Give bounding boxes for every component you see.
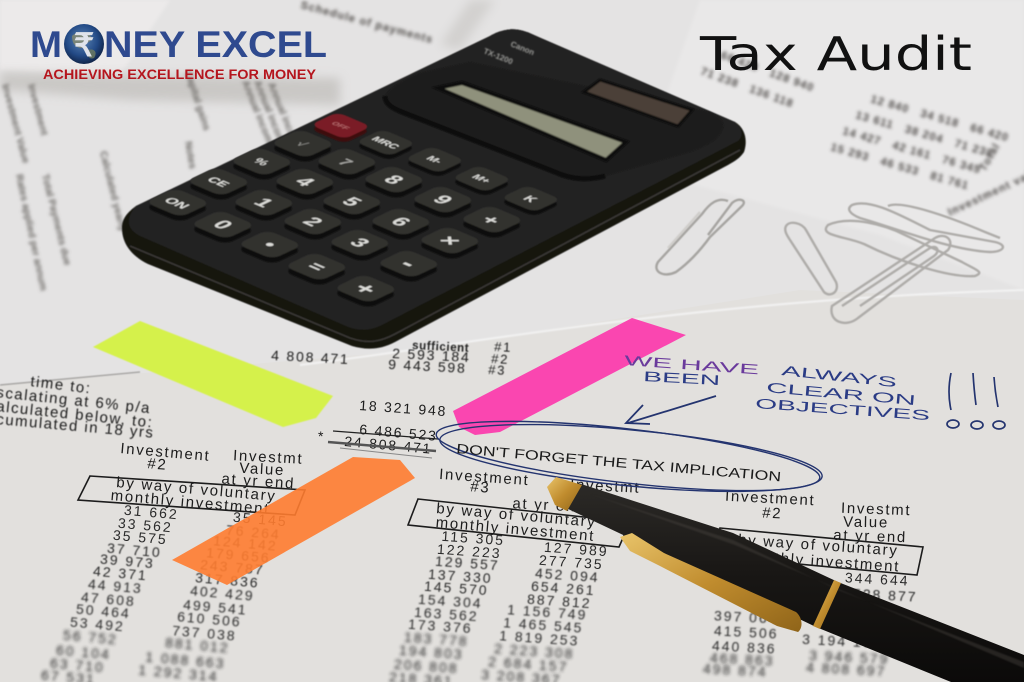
handwritten note: OBJECTIVES (755, 395, 930, 423)
pen gold tip (547, 477, 582, 511)
blurred printed rows: top left paper: Investment Value (0, 83, 31, 165)
table middle: value columns: 452 094 (535, 565, 600, 585)
blurred printed rows: top left paper: Annual income (251, 79, 288, 150)
key row 1: • (256, 239, 283, 251)
table left: value columns: 60 104 (55, 642, 111, 662)
key row 3: 6 (385, 215, 416, 229)
table middle: value columns: 163 562 (414, 604, 479, 624)
key row 5: M- (423, 155, 446, 165)
table middle: value columns: 1 156 749 (507, 601, 588, 623)
blurred printed rows: top right paper: 15 293 46 533 81 761 (829, 141, 970, 192)
key row 3: 5 (336, 195, 367, 209)
blurred printed rows: top right paper: 71 238 136 118 (699, 66, 795, 110)
blurred printed rows: top right paper: Schedule of payments (299, 0, 434, 46)
key row 3: 4 (289, 175, 320, 189)
table middle: value columns: 277 735 (539, 552, 604, 572)
table middle: headers and box: Investmt (570, 476, 641, 497)
calculator solar panel (584, 80, 692, 126)
key row 4 (264, 129, 530, 240)
table left: value columns: 56 752 (62, 627, 118, 647)
table right: headers and box: at yr end (833, 527, 907, 546)
table left: value columns: 402 429 (190, 582, 255, 604)
printed totals: 2 593 184 (392, 345, 471, 365)
table left: value columns: 317 836 (195, 569, 260, 591)
pen gold ring (813, 580, 841, 629)
table left: value columns: 31 662 (123, 502, 179, 522)
table right: value columns: 468 863 (710, 649, 775, 669)
printed text: upper left paragraph: scalating at 6% p/a (0, 384, 152, 417)
calculator (122, 29, 746, 349)
pen barrel (566, 483, 1024, 682)
table right: value columns: 415 506 (714, 622, 779, 642)
table middle: value columns: 1 819 253 (499, 627, 580, 649)
table right: value columns: 498 874 (703, 660, 768, 680)
table left: value columns (40, 502, 288, 682)
table middle: value columns: 194 803 (399, 642, 464, 662)
printed totals: sufficient (412, 340, 470, 355)
key row 3: × (432, 232, 468, 249)
table left: value columns: 1 088 663 (145, 649, 226, 671)
table left: headers and box: Investmt (233, 447, 304, 468)
table right: value columns (703, 569, 918, 680)
blurred printed rows: top right paper: 12 840 34 518 66 420 (869, 93, 1010, 144)
table right: value columns: 397 064 (714, 607, 779, 627)
sticky tab: orange (172, 457, 415, 585)
table middle: value columns: 127 989 (544, 539, 609, 559)
table right: value columns: 3 946 579 (809, 647, 890, 667)
table middle: value columns: 137 330 (428, 566, 493, 586)
key row 2: 3 (344, 236, 375, 250)
printed text: upper left paragraph: time to: (30, 373, 92, 397)
table left: value columns: 50 464 (75, 601, 131, 621)
table left: headers and box: #2 (147, 455, 168, 474)
table middle: value columns (389, 528, 609, 682)
key row 4: + (475, 213, 506, 227)
table left: value columns: 35 575 (112, 527, 168, 547)
calculator brand label: TX-1200 (482, 47, 515, 67)
table right: headers and box: Investment (725, 488, 816, 509)
calculator keys (139, 112, 566, 309)
table right: value columns: 3 194 170 (802, 631, 883, 651)
blurred printed rows: top left paper (0, 70, 302, 292)
printed totals: #3 (488, 362, 507, 378)
logo globe with rupee (64, 24, 104, 64)
paper clip: single (656, 200, 744, 274)
key row 5: MRC (368, 136, 402, 151)
table middle: value columns: 2 684 157 (488, 653, 569, 675)
table right: value columns: 4 808 697 (806, 659, 887, 679)
table left: value columns: 243 787 (200, 556, 265, 578)
sticky tab: yellow (93, 321, 333, 427)
printed totals (271, 339, 513, 458)
blurred printed rows: top right paper (299, 0, 1024, 219)
handwritten note: ALWAYS (781, 362, 898, 390)
handwritten note: WE HAVE (624, 352, 760, 377)
handwritten arrow (626, 396, 716, 424)
sticky tab: pink (453, 318, 686, 435)
blurred printed rows: top left paper: Calculated yearly (97, 150, 128, 233)
table left: headers and box: at yr end (221, 470, 296, 493)
table right: value columns: 440 836 (712, 637, 777, 657)
calculator display bezel (384, 62, 724, 179)
table left: value columns: 124 142 (213, 532, 278, 554)
table middle: headers and box: #3 (470, 478, 491, 497)
table left: value columns: 179 656 (206, 544, 271, 566)
note text: DON'T FORGET THE TAX IMPLICATION (456, 441, 782, 484)
table left: headers and box: Value (239, 460, 286, 479)
pen (547, 477, 1024, 682)
key row 4: 7 (333, 157, 356, 168)
printed totals: 9 443 598 (388, 356, 467, 376)
table left: value columns: 44 913 (87, 576, 143, 596)
calculator brand label (482, 40, 536, 67)
table middle: value columns: 654 261 (531, 578, 596, 598)
table left: value columns: 76 264 (225, 522, 281, 542)
table left: headers and box: Investment (120, 440, 211, 465)
printed text: upper left paragraph: cumulated in 18 yrs (0, 411, 155, 442)
table right: headers and box: Value (843, 514, 889, 531)
key row 5 (305, 112, 566, 217)
table left: value columns: 39 973 (99, 551, 155, 571)
table middle: value columns: 2 223 308 (494, 640, 575, 662)
table middle: value columns: 183 778 (404, 629, 469, 649)
table middle: value columns: 173 376 (408, 616, 473, 636)
table middle: headers and box: Investment (439, 466, 530, 489)
table left: value columns: 63 710 (49, 655, 105, 675)
table right: value columns: 528 877 (853, 585, 918, 605)
key row 4: 8 (378, 173, 409, 187)
printed totals: #1 (494, 339, 513, 355)
blurred printed rows: top left paper: Annual income (265, 81, 302, 152)
table right: headers and box (712, 488, 923, 576)
table left: value columns: 42 371 (92, 563, 148, 583)
handwritten note: BEEN (643, 368, 721, 388)
logo wordmark: M (30, 24, 62, 65)
calculator body (122, 29, 746, 349)
blurred printed rows: top left paper: Investment (25, 83, 50, 137)
key row 1 (139, 188, 404, 309)
circled note (433, 407, 825, 505)
key row 3: % (250, 157, 273, 167)
logo globe with rupee: ₹ (74, 27, 94, 63)
table left: value columns: 37 710 (106, 540, 162, 560)
table left: value columns: 53 492 (69, 614, 125, 634)
table middle: value columns: 145 570 (424, 578, 489, 598)
blurred printed rows: top right paper: 13 611 38 204 71 238 (854, 109, 995, 160)
key row 5: OFF (329, 121, 352, 131)
table right: headers and box: #2 (762, 504, 783, 523)
key row 2 (180, 167, 447, 284)
table left: value columns: 737 038 (172, 622, 237, 644)
handwritten ellipse (433, 407, 825, 505)
pen gold clip (620, 533, 802, 632)
table middle: headers and box: by way of voluntary (436, 500, 597, 531)
table middle: value columns: 129 557 (435, 553, 500, 573)
key row 1: = (301, 260, 332, 274)
logo: NEY EXCEL (104, 24, 327, 65)
table middle: value columns: 887 812 (527, 591, 592, 611)
printed text: upper left paragraph (0, 373, 155, 442)
table left: value columns: 610 506 (177, 608, 242, 630)
key row 5: M+ (469, 173, 494, 185)
blurred printed rows: top right paper: Total (977, 141, 1003, 174)
blurred printed rows: top left paper: Rates applied per annum (13, 173, 49, 292)
blurred printed rows: top right paper: 14 427 42 161 76 345 (841, 125, 982, 176)
paper clips: cluster (785, 203, 1003, 323)
blurred printed rows: top left paper: Annual income (239, 79, 276, 150)
blurred printed rows: top left paper: Total Payments due (39, 173, 73, 267)
blurred printed rows: top right paper: 66 420 128 940 (719, 50, 816, 95)
printed text: upper left paragraph: alculated below, to: (0, 398, 154, 431)
key row 2: - (392, 255, 427, 272)
printed totals: 24 808 471 (344, 433, 433, 457)
printed totals: #2 (491, 351, 510, 367)
table right: headers and box: monthly investment (740, 547, 901, 576)
table left: value columns: 47 608 (80, 589, 136, 609)
table middle: headers and box: at yr end (512, 495, 586, 516)
table middle: value columns: 115 305 (441, 528, 506, 548)
key row 4: 9 (427, 193, 458, 207)
table left: headers and box: monthly investment (110, 487, 271, 518)
table middle: headers and box: monthly investment (435, 514, 596, 545)
key row 1: ON (160, 196, 193, 210)
table right: headers and box: by way of voluntary (738, 531, 899, 560)
table left: headers and box (78, 440, 305, 518)
table left: value columns: 499 541 (183, 596, 248, 618)
key row 1: 0 (207, 218, 238, 232)
key row 5: K (520, 194, 541, 204)
key row 2: 1 (248, 196, 279, 210)
logo (30, 24, 327, 82)
key row 3 (223, 147, 488, 261)
handwritten note: CLEAR ON (766, 379, 917, 408)
table left: headers and box: by way of voluntary (116, 474, 277, 505)
handwritten exclamation marks (947, 373, 1005, 429)
table left: value columns: 35 145 (232, 509, 288, 529)
handwritten note (624, 352, 930, 423)
key row 4: √ (293, 140, 311, 148)
table middle: headers and box (408, 466, 641, 547)
table right: headers and box: Investmt (841, 500, 912, 519)
blurred printed rows: top left paper: Notes (182, 141, 198, 170)
table middle: value columns: 122 223 (437, 541, 502, 561)
printed totals: 6 486 523 (359, 421, 438, 444)
calculator LCD screen (438, 83, 626, 160)
title: Tax Audit (699, 27, 972, 81)
logo tagline: ACHIEVING EXCELLENCE FOR MONEY (43, 67, 316, 82)
table middle: value columns: 1 465 545 (503, 614, 584, 636)
key row 2: 2 (297, 215, 328, 229)
calculator brand label: Canon (509, 40, 536, 57)
table middle: value columns: 206 808 (394, 656, 459, 676)
table left: value columns: 881 012 (165, 634, 230, 656)
printed totals: 18 321 948 (359, 397, 448, 419)
table left: value columns: 33 562 (117, 515, 173, 535)
printed totals: * (318, 428, 325, 444)
table middle: value columns: 154 304 (418, 591, 483, 611)
table right: value columns: 344 644 (845, 569, 910, 589)
blurred printed rows: top left paper: Capital gains (182, 70, 212, 133)
printed totals: 4 808 471 (271, 347, 350, 367)
key row 2: CE (204, 175, 233, 188)
key row 1: + (346, 280, 384, 298)
